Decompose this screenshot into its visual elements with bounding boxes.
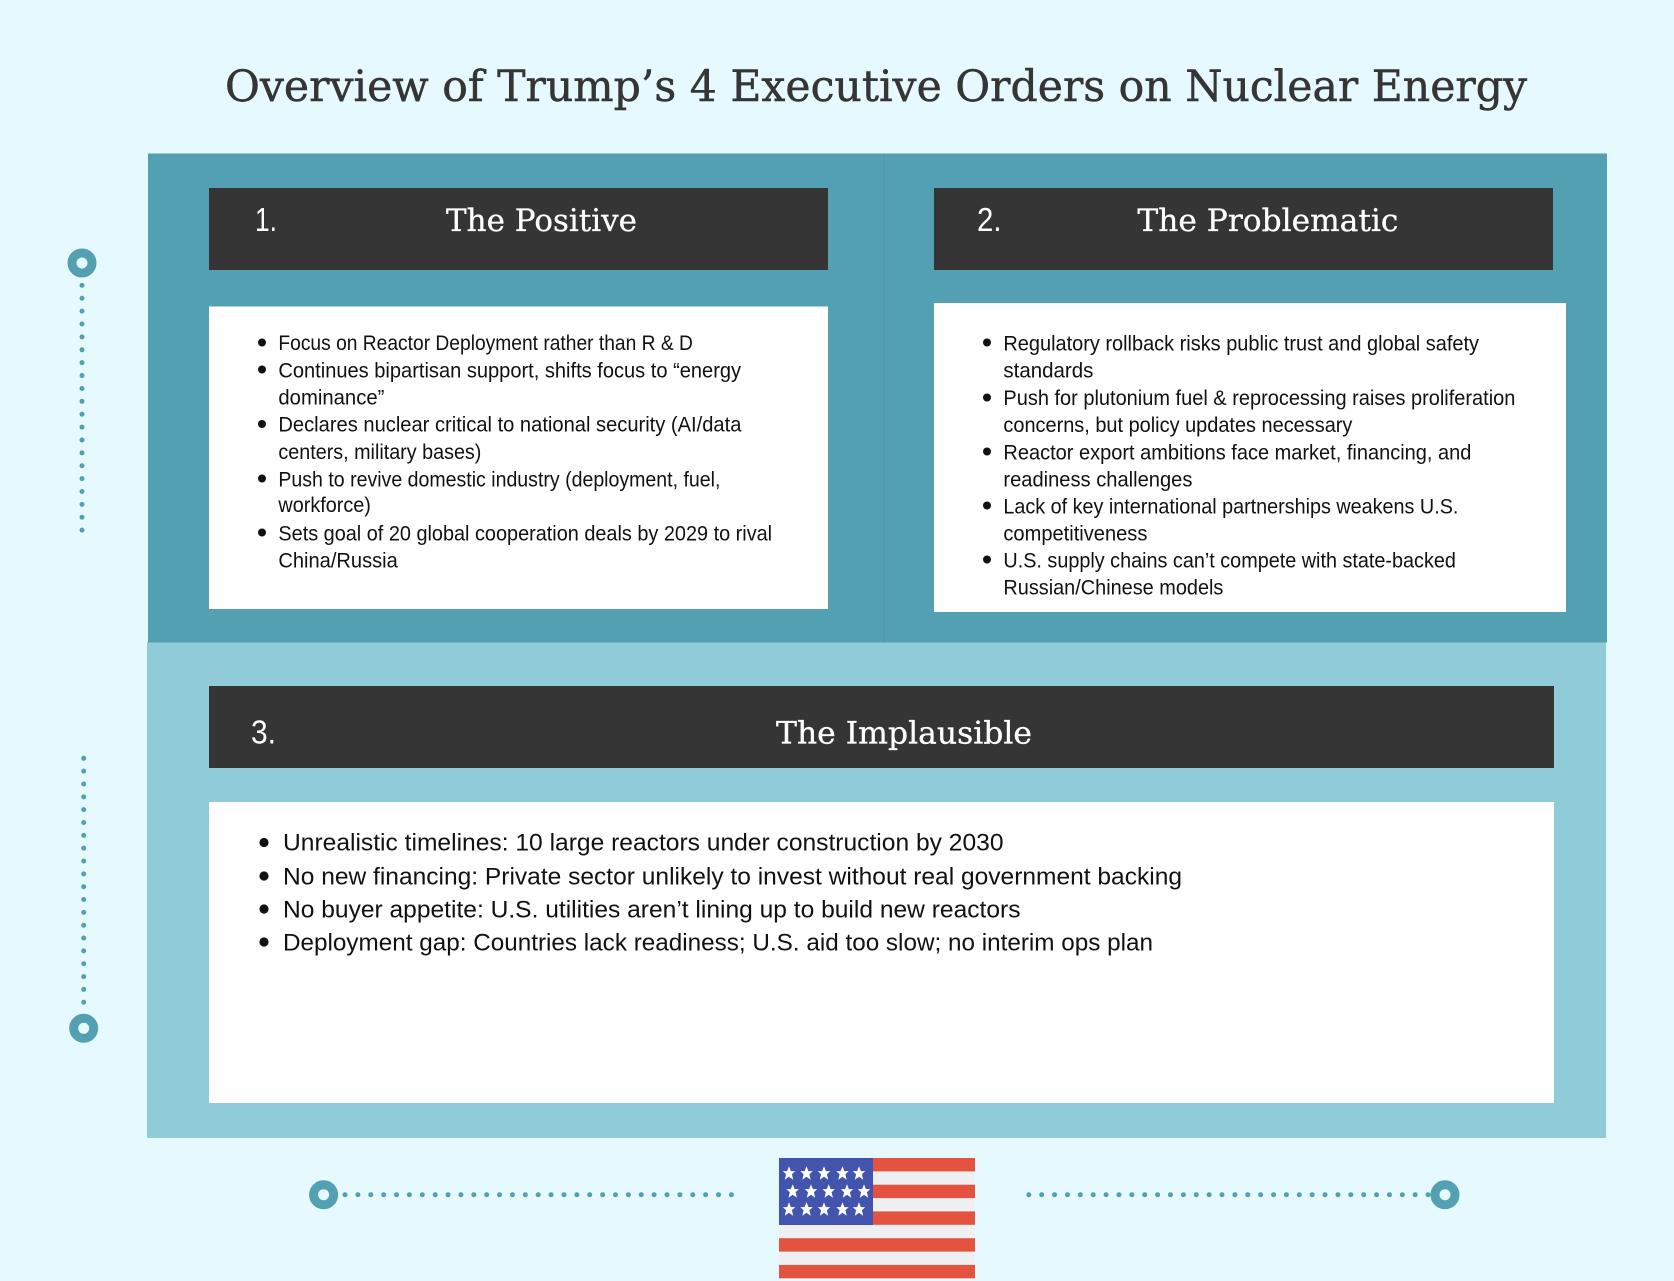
text block: positive bullets: dominance” xyxy=(278,386,384,410)
text block: implausible bullets xyxy=(209,802,1554,1103)
text block: implausible bullets: Deployment gap: Countries lack readiness; U.S. aid too slow; no interim ops plan xyxy=(283,930,1153,957)
text block: problematic bullets: standards xyxy=(1003,360,1093,383)
heading: the positive xyxy=(209,188,828,270)
text block: positive bullets: China/Russia xyxy=(278,549,398,572)
text block: positive bullets: Declares nuclear critical to national security (AI/data xyxy=(278,413,742,436)
text block: problematic bullets: Push for plutonium fuel & reprocessing raises proliferation xyxy=(1003,387,1515,410)
text block: positive bullets: Continues bipartisan support, shifts focus to “energy xyxy=(278,360,742,382)
text block: problematic bullets: Lack of key international partnerships weakens U.S. xyxy=(1003,496,1458,519)
timeline: bottom right connector xyxy=(1029,1185,1455,1205)
heading: the implausible xyxy=(209,686,1554,768)
text block: problematic bullets: competitiveness xyxy=(1003,522,1147,545)
heading: the problematic xyxy=(934,188,1553,270)
text block: positive bullets: centers, military bases) xyxy=(278,441,481,464)
text block: implausible bullets: Unrealistic timelines: 10 large reactors under construction by 2030 xyxy=(283,830,1004,857)
timeline: bottom left connector xyxy=(314,1185,733,1205)
text block: problematic bullets: Russian/Chinese models xyxy=(1003,576,1223,600)
heading: the problematic: 2. xyxy=(977,201,1002,238)
timeline: left bottom connector xyxy=(74,758,94,1038)
text block: problematic bullets: Regulatory rollback risks public trust and global safety xyxy=(1003,333,1479,356)
timeline: left top connector xyxy=(72,253,92,531)
heading: the problematic: The Problematic xyxy=(1137,203,1398,239)
icon: american flag xyxy=(779,1158,975,1278)
heading: the positive: 1. xyxy=(255,201,277,238)
title: Overview of Trump’s 4 Executive Orders on Nuclear Energy xyxy=(225,62,1528,112)
text block: problematic bullets: U.S. supply chains can’t compete with state-backed xyxy=(1003,549,1456,572)
text block: problematic bullets: Reactor export ambitions face market, financing, and xyxy=(1003,441,1471,464)
text block: positive bullets: Sets goal of 20 global cooperation deals by 2029 to rival xyxy=(278,522,772,545)
panel: the problematic xyxy=(884,154,1607,642)
text block: implausible bullets: No buyer appetite: U.S. utilities aren’t lining up to build new reactors xyxy=(283,897,1020,924)
heading: the implausible: 3. xyxy=(251,714,276,751)
text block: problematic bullets: concerns, but policy updates necessary xyxy=(1003,414,1353,437)
text block: positive bullets: workforce) xyxy=(277,494,371,517)
text block: positive bullets xyxy=(209,306,828,609)
text block: problematic bullets: readiness challenges xyxy=(1003,469,1192,492)
heading: the positive: The Positive xyxy=(446,203,637,239)
text block: positive bullets: Focus on Reactor Deployment rather than R & D xyxy=(278,332,693,355)
text block: implausible bullets: No new financing: Private sector unlikely to invest without real government backing xyxy=(283,864,1182,891)
text block: positive bullets: Push to revive domestic industry (deployment, fuel, xyxy=(278,468,720,492)
panel: the positive xyxy=(148,154,884,642)
heading: the implausible: The Implausible xyxy=(776,716,1032,752)
panel: the implausible xyxy=(147,642,1606,1138)
text block: problematic bullets xyxy=(934,303,1566,612)
